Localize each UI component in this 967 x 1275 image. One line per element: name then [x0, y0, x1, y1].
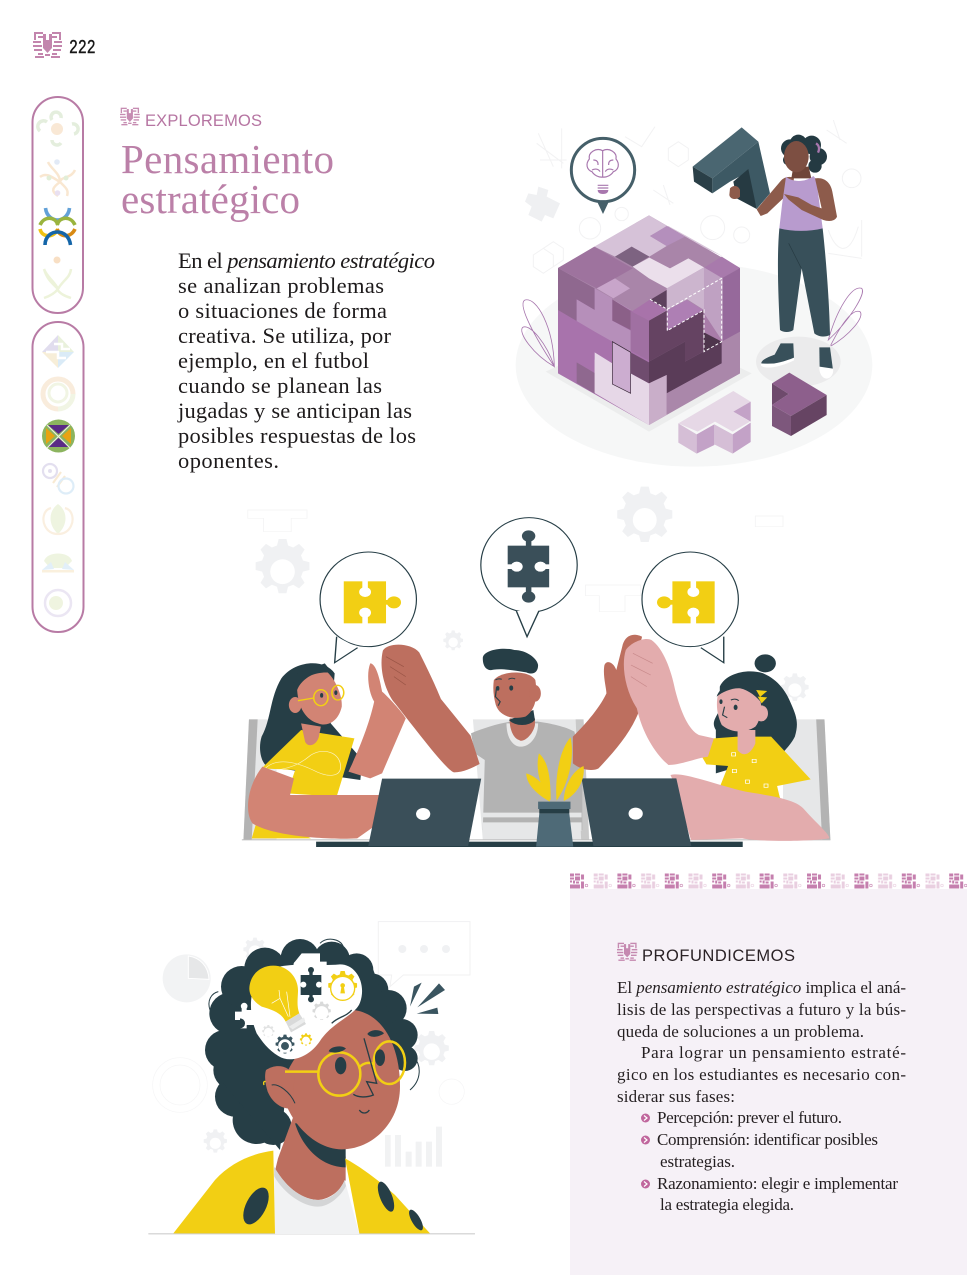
dark gear with people [276, 1035, 294, 1053]
salmon hand and arm [348, 663, 406, 778]
bullet 3: la estrategia elegida. [660, 1195, 794, 1214]
gray shirt [471, 722, 582, 830]
shirt [692, 737, 811, 796]
intro paragraph: jugadas y se anticipan las [177, 398, 412, 423]
bullet 3 [641, 1174, 898, 1214]
long hair [714, 671, 797, 773]
neck [301, 723, 321, 745]
plant outlines [522, 288, 862, 367]
cube left face [558, 268, 649, 425]
bullet 2: estrategias. [660, 1152, 735, 1171]
white brain opening [235, 953, 362, 1059]
face features [495, 678, 515, 706]
icon: pale turtle [42, 554, 74, 572]
accent rays [410, 983, 445, 1014]
icon: active coloured rings [40, 208, 75, 245]
shoes [761, 343, 833, 379]
infinity line on shirt [264, 751, 341, 775]
icon: pale leaf figure [44, 256, 71, 298]
panel paragraph: gico en los estudiantes es necesario con- [617, 1065, 906, 1084]
eyes and brows [329, 1030, 385, 1074]
intro paragraph: o situaciones de forma [178, 298, 387, 323]
neck [738, 730, 755, 754]
heading with icon: PROFUNDICEMOS [642, 947, 795, 965]
legs [778, 228, 830, 337]
yellow puzzle piece [657, 581, 715, 624]
woman holding a block [693, 127, 841, 387]
yellow jacket [173, 1151, 430, 1233]
intro paragraph: ejemplo, en el futbol [178, 348, 369, 373]
bullet 2 [641, 1130, 878, 1171]
right arm [784, 178, 837, 221]
brain lightbulb [587, 150, 618, 194]
intro paragraph [177, 248, 435, 473]
icon: page ornament [33, 32, 62, 58]
dashed ghost piece [650, 278, 722, 352]
faint background icons [525, 120, 862, 273]
background blob [516, 263, 872, 467]
speech bubble: left [320, 552, 416, 663]
hair [483, 649, 538, 674]
hair [781, 135, 827, 173]
chin shadow [295, 1123, 346, 1167]
panel: Profundicemos [570, 873, 967, 1275]
bullet 3: Razonamiento: elegir e implementar [657, 1174, 898, 1193]
panel paragraph: lisis de las perspectivas a futuro y la bús- [617, 1000, 906, 1019]
panel paragraph: queda de soluciones a un problema. [617, 1022, 864, 1041]
page number: 222 [69, 39, 96, 60]
yellow shirt bottom [252, 812, 311, 838]
icon: pale spiral flower [38, 112, 78, 145]
white puzzle left [235, 1003, 257, 1028]
title [121, 136, 334, 222]
yellow gear with chess pawn [328, 971, 357, 1001]
dark L block [693, 127, 770, 209]
nose and mouth [332, 1010, 377, 1113]
pink raised arm [624, 639, 714, 765]
hair clips [756, 690, 767, 703]
loose dark puzzle piece [772, 373, 827, 436]
girl left with glasses [248, 663, 406, 839]
raised right arm [573, 635, 642, 770]
yellow puzzle piece [344, 581, 401, 624]
boy center [382, 635, 642, 831]
neck [274, 1117, 346, 1200]
puzzle cube [558, 215, 740, 425]
big lower arm [248, 767, 381, 839]
title: Pensamiento [121, 136, 334, 182]
loose light puzzle piece [678, 391, 751, 454]
icon: ornament [120, 108, 140, 125]
collar and neck [506, 723, 538, 747]
bullet 2: Comprensión: identificar posibles [657, 1130, 878, 1149]
neck and face [791, 167, 811, 178]
speech bubble with brain [571, 138, 635, 214]
intro paragraph: oponentes. [178, 448, 279, 473]
hair [205, 939, 419, 1150]
face features [320, 690, 337, 698]
small gray gear [262, 1025, 274, 1037]
bullet 1: Percepción: prever el futuro. [657, 1108, 842, 1127]
hair fringe [717, 680, 765, 707]
bullet list [641, 1108, 898, 1214]
heading with icon [617, 943, 795, 965]
ground circle [756, 337, 841, 387]
icon: pale sun ring [45, 590, 71, 616]
icon: pale branching figure [40, 159, 75, 196]
speech bubble: middle [481, 518, 577, 637]
decorative ornament band [570, 873, 967, 889]
glasses [264, 1041, 405, 1096]
ear [265, 1066, 294, 1109]
speech bubble: right [642, 552, 738, 663]
dark puzzle piece [507, 530, 550, 603]
small yellow gear [300, 1033, 312, 1046]
panel paragraph [617, 978, 906, 1106]
illustration: puzzle cube and woman [516, 120, 872, 467]
pink lower arm [670, 774, 829, 841]
icon: pale concentric ring [43, 379, 73, 409]
intro paragraph: se analizan problemas [178, 273, 384, 298]
head [297, 672, 342, 724]
panel paragraph: Para lograr un pensamiento estraté- [641, 1043, 906, 1062]
faint background gears and boxes [248, 487, 809, 701]
panel paragraph: siderar sus fases: [617, 1087, 735, 1106]
icon: pale percent rings [43, 464, 74, 494]
illustration: three friends high five [242, 487, 830, 847]
page header: ornament and page number [33, 32, 96, 60]
sidebar pill: ejes articuladores [32, 322, 84, 632]
intro paragraph: En el pensamiento estratégico [178, 248, 435, 273]
white puzzle top [294, 953, 327, 968]
t-shirt [274, 1167, 359, 1234]
long hair [260, 663, 362, 780]
icon: pale diamond [42, 335, 74, 368]
intro paragraph: cuando se planean las [178, 373, 382, 398]
glasses [298, 685, 344, 706]
intro paragraph: posibles respuestas de los [178, 423, 416, 448]
tank top [779, 176, 823, 231]
label text: EXPLOREMOS [145, 112, 262, 130]
raised left arm [382, 645, 480, 772]
intro paragraph: creativa. Se utiliza, por [178, 323, 392, 348]
illustration: thinker with light bulb head [148, 922, 475, 1234]
title: estratégico [121, 176, 300, 222]
shirt [262, 730, 354, 797]
chairs and table [242, 719, 830, 847]
cube top face [558, 215, 740, 321]
head [717, 685, 761, 731]
light bulb [249, 966, 306, 1032]
sidebar pill: campos formativos [32, 97, 83, 313]
face [287, 1010, 400, 1149]
floor line [148, 1233, 475, 1234]
potted plant [526, 737, 584, 847]
section label: Exploremos [120, 108, 262, 130]
faint background icons [153, 922, 470, 1167]
head [493, 672, 536, 718]
girl right with bun [624, 639, 829, 841]
floor shadow under cube [546, 323, 752, 432]
icon: active green circle [42, 420, 75, 452]
panel paragraph: El pensamiento estratégico implica el aná- [617, 978, 906, 997]
cube right face [631, 267, 740, 425]
arm left [757, 177, 794, 216]
face features [723, 699, 739, 718]
gray gear [313, 1002, 331, 1020]
dark puzzle piece [300, 967, 322, 1002]
icon: pale lotus [43, 504, 73, 534]
laptops [368, 778, 691, 846]
